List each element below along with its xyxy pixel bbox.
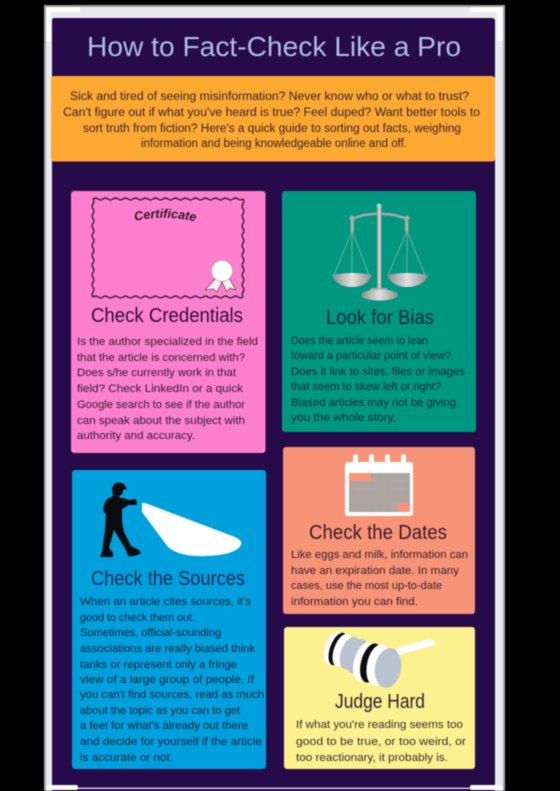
- text block: cases, use the most up-to-date: [291, 580, 442, 592]
- icon: gavel: [320, 629, 434, 690]
- text block: When an article cites sources, it's: [80, 596, 252, 608]
- panel: intro: information and being knowledgeable online and off.: [141, 138, 407, 150]
- text block: Sometimes, official-sounding: [80, 627, 221, 639]
- text block: Does s/he currently work in that: [77, 367, 236, 379]
- text block: Does it link to sites, files or images: [291, 366, 466, 378]
- text block: too reactionary, it probably is.: [296, 752, 448, 764]
- heading: Judge Hard: [335, 691, 425, 713]
- panel: intro: sort truth from fiction? Here's a quick guide to sorting out facts, weighing: [83, 123, 461, 135]
- panel: check credentials: [70, 190, 266, 454]
- purple background panel: [52, 18, 495, 791]
- text block: can speak about the subject with: [77, 415, 245, 427]
- icon: flashlight beam: [142, 503, 241, 556]
- heading: Look for Bias: [326, 307, 434, 329]
- heading: Check the Dates: [309, 522, 447, 544]
- text block: field? Check LinkedIn or a quick: [77, 383, 244, 395]
- heading: Check Credentials: [91, 305, 243, 327]
- text block: [291, 549, 468, 608]
- text block: Is the author specialized in the field: [77, 336, 258, 348]
- text block: information you can find.: [291, 596, 418, 608]
- text block: toward a particular point of view?: [291, 350, 451, 362]
- text block: and decide for yourself if the article: [80, 736, 262, 748]
- text block: about the topic as you can to get: [80, 705, 240, 717]
- text block: a feel for what's already out there: [80, 720, 248, 732]
- text block: [291, 335, 466, 424]
- icon: calendar: [345, 454, 413, 516]
- text block: you can't find sources, read as much: [80, 689, 264, 701]
- text block: Biased articles may not be giving: [291, 397, 456, 409]
- icon: certificate: [90, 196, 246, 300]
- text block: that the article is concerned with?: [77, 352, 245, 364]
- text block: that seem to skew left or right?: [291, 381, 441, 393]
- text block: Google search to see if the author: [77, 399, 245, 411]
- title: How to Fact-Check Like a Pro: [87, 31, 461, 62]
- panel: intro: [51, 76, 495, 162]
- panel: intro: Can't figure out if what you've heard is true? Feel duped? Want better tools to: [63, 107, 480, 119]
- panel: check the dates: [283, 447, 475, 614]
- panel: judge hard: [284, 627, 475, 769]
- text block: have an expiration date. In many: [291, 565, 460, 577]
- text block: Does the article seem to lean: [291, 335, 428, 347]
- text block: you the whole story.: [291, 412, 396, 424]
- text block: [80, 596, 264, 764]
- text block: is accurate or not.: [80, 752, 173, 764]
- text block: [296, 719, 466, 764]
- bottom frame strip: [46, 785, 503, 790]
- icon: man with flashlight: [100, 482, 241, 557]
- panel: check the sources: [72, 470, 266, 769]
- icon: scales of justice: [332, 204, 428, 300]
- text block: Like eggs and milk, information can: [291, 549, 468, 561]
- text block: good to check them out.: [80, 612, 195, 624]
- text block: tanks or represent only a fringe: [80, 659, 237, 671]
- heading: Check the Sources: [91, 568, 245, 590]
- panel: look for bias: [282, 191, 476, 432]
- text block: view of a large group of people. If: [80, 674, 255, 686]
- text block: good to be true, or too weird, or: [296, 736, 466, 748]
- panel: intro: Sick and tired of seeing misinformation? Never know who or what to trust?: [70, 91, 469, 103]
- text block: [77, 336, 258, 442]
- text block: associations are really biased think: [80, 643, 256, 655]
- text block: If what you're reading seems too: [296, 719, 463, 731]
- icon: certificate: Certificate: [134, 208, 197, 222]
- text block: authority and accuracy.: [77, 430, 195, 442]
